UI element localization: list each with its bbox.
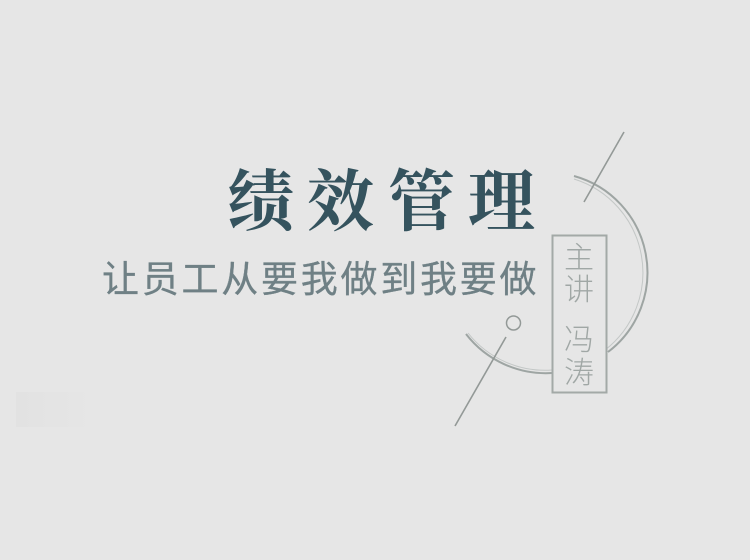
title: 理 — [468, 149, 535, 245]
title — [227, 149, 535, 245]
speaker label: 涛 — [564, 348, 594, 392]
large arc — [466, 176, 647, 373]
speaker label: 讲 — [564, 265, 594, 309]
speaker box outline — [552, 236, 606, 392]
upper diagonal line — [584, 132, 624, 202]
title: 管 — [388, 149, 455, 245]
subtitle: 让员工从要我做到我要做 — [102, 259, 539, 300]
title: 绩 — [227, 149, 294, 245]
faint background patch — [16, 392, 96, 427]
speaker label — [564, 233, 594, 392]
lower diagonal line — [455, 337, 506, 426]
small ring — [506, 316, 520, 330]
speaker label: 冯 — [564, 315, 594, 359]
title: 效 — [307, 149, 374, 245]
speaker label: 主 — [564, 233, 594, 277]
